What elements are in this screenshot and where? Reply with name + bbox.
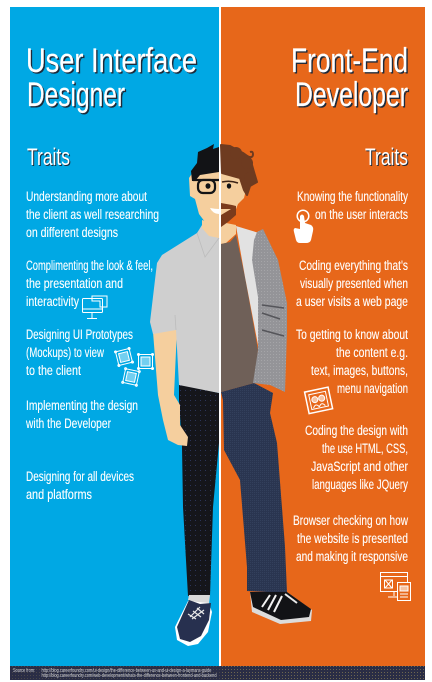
left grey shirt xyxy=(150,225,219,393)
text block: left trait 2: Complimenting the look & feel, xyxy=(26,258,153,273)
right brown hair xyxy=(221,145,257,195)
icon: monitor wireframe xyxy=(82,296,107,318)
text block: right trait 2 xyxy=(296,258,408,309)
right eye xyxy=(227,183,231,189)
text block: left trait 4: with the Developer xyxy=(25,416,111,431)
text block: left trait 5: and platforms xyxy=(26,487,92,502)
title: front-end developer xyxy=(291,42,410,116)
icon: responsive devices xyxy=(380,572,410,600)
text block: right trait 1 xyxy=(297,189,408,222)
text block: left trait 1 xyxy=(26,189,159,240)
title: user interface designer: User Interface xyxy=(26,42,197,80)
right beard xyxy=(221,203,236,227)
text block: left trait 5: Designing for all devices xyxy=(26,469,134,484)
title: user interface designer xyxy=(26,42,198,116)
text block: right trait 4: JavaScript and other xyxy=(311,459,408,474)
panel: user interface designer background xyxy=(10,7,219,666)
text block: right trait 3: the content e.g. xyxy=(336,345,408,360)
text block: left trait 3 xyxy=(26,327,133,378)
left navy shoe xyxy=(177,600,211,642)
heading: traits left: Traits xyxy=(28,145,71,172)
icon: mockup cards xyxy=(114,347,154,386)
illustration: split-person figure xyxy=(150,144,312,646)
text block: left trait 1: Understanding more about xyxy=(26,189,147,204)
title: user interface designer: Designer xyxy=(28,78,126,116)
footer source bar: http://blog.careerfoundry.com/ui-design/the-difference-between-ux-and-ui-design-a-laymans-guide xyxy=(42,668,212,674)
text block: left trait 2: the presentation and xyxy=(26,276,123,291)
footer source bar: Source from: xyxy=(13,668,35,674)
left arm and hand xyxy=(153,329,188,446)
heading: traits left: Traits xyxy=(27,144,70,171)
icon: picture frame xyxy=(305,387,333,414)
left black hair xyxy=(191,144,219,181)
icon: touch hand xyxy=(294,210,313,243)
centre divider xyxy=(219,7,221,666)
footer source bar: http://blog.careerfoundry.com/web-development/whats-the-difference-between-frontend-and-backend xyxy=(42,673,217,679)
title: user interface designer: User Interface xyxy=(28,44,198,82)
left black trousers xyxy=(179,384,219,596)
title: user interface designer: Designer xyxy=(27,76,125,114)
heading: traits right: Traits xyxy=(366,145,409,172)
left sole xyxy=(175,601,212,646)
panel: front-end developer background xyxy=(221,7,425,666)
right grey hoodie xyxy=(252,229,287,392)
text block: left trait 3: to the client xyxy=(26,363,81,378)
text block: left trait 2: interactivity xyxy=(26,294,79,309)
text block: left trait 2 xyxy=(26,258,153,309)
text block: right trait 4 xyxy=(305,423,408,492)
left shoe laces xyxy=(188,607,204,619)
left smile xyxy=(210,208,219,214)
text block: right trait 5 xyxy=(293,513,408,564)
right shoe xyxy=(250,592,312,624)
right jeans xyxy=(221,383,287,593)
text block: left trait 3: Designing UI Prototypes xyxy=(26,327,133,342)
right face xyxy=(221,173,246,228)
heading: traits right: Traits xyxy=(365,144,408,171)
left eye xyxy=(206,183,210,189)
text block: left trait 4 xyxy=(25,398,138,431)
text block: left trait 1: the client as well researching xyxy=(26,207,159,222)
right eyebrow xyxy=(222,181,238,183)
text block: right trait 3 xyxy=(296,327,408,396)
left face xyxy=(189,170,219,231)
footer source bar xyxy=(10,666,425,680)
glasses xyxy=(193,180,219,193)
right neck xyxy=(221,222,236,244)
hoodie inner xyxy=(236,226,262,345)
right brown t-shirt xyxy=(221,235,258,392)
left neck xyxy=(202,220,219,238)
text block: left trait 4: Implementing the design xyxy=(26,398,138,413)
text block: left trait 5 xyxy=(26,469,134,502)
left sock xyxy=(188,595,210,604)
text block: left trait 3: (Mockups) to view xyxy=(26,345,104,360)
text block: left trait 1: on different designs xyxy=(26,225,118,240)
